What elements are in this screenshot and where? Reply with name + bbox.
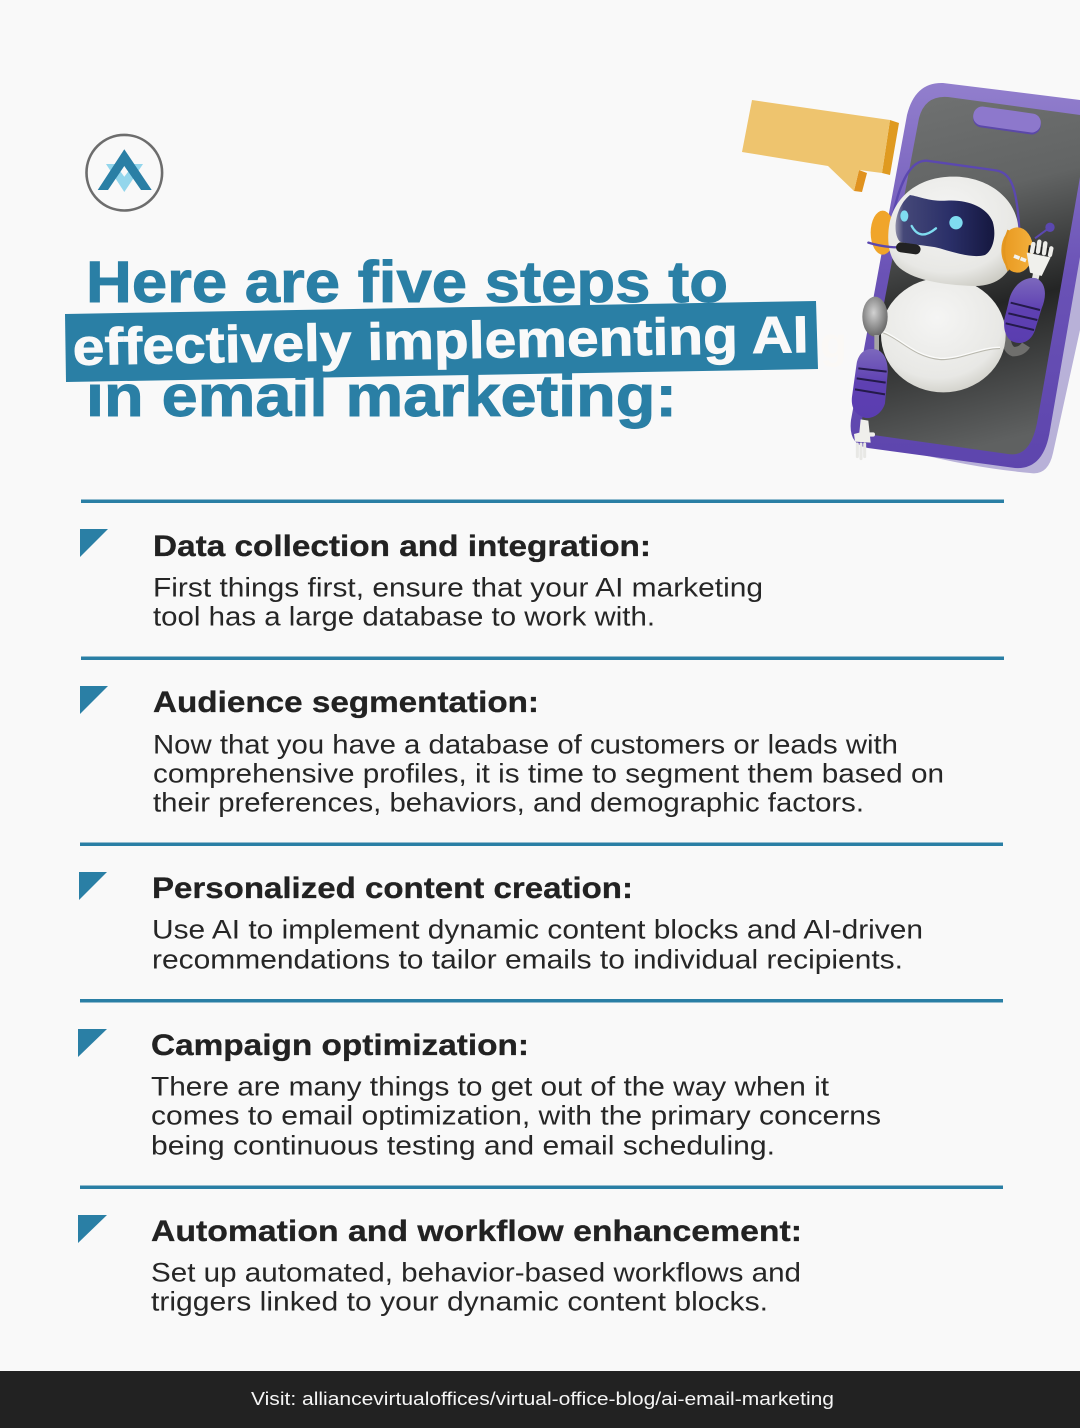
eyes and smile xyxy=(900,210,963,234)
step 2 text xyxy=(153,730,944,818)
step 2 text: their preferences, behaviors, and demographic factors. xyxy=(153,788,864,818)
step 1 heading: Data collection and integration: xyxy=(153,530,651,563)
robot xyxy=(852,161,1055,459)
footer link text: Visit: alliancevirtualoffices/virtual-office-blog/ai-email-marketing xyxy=(251,1389,834,1409)
step 2 heading: Audience segmentation: xyxy=(153,686,539,719)
step 5 xyxy=(78,1186,1003,1317)
step 3 text xyxy=(152,915,923,975)
arms xyxy=(852,278,1045,459)
step 1 text: tool has a large database to work with. xyxy=(153,602,655,632)
step 5 heading: Automation and workflow enhancement: xyxy=(151,1215,802,1248)
title line 3: in email marketing: xyxy=(86,364,677,429)
step 2 text: Now that you have a database of customers or leads with xyxy=(153,730,898,760)
step 2 text: comprehensive profiles, it is time to segment them based on xyxy=(153,759,944,789)
visor xyxy=(896,195,994,256)
step 4 heading: Campaign optimization: xyxy=(151,1029,529,1062)
left shoulder xyxy=(862,297,888,351)
right arm joint xyxy=(1005,320,1026,352)
step 4 text: There are many things to get out of the way when it xyxy=(151,1072,830,1102)
logo xyxy=(86,135,162,210)
title line 1: Here are five steps to xyxy=(86,250,728,315)
illustration: robot on phone with speech bubble xyxy=(742,83,1080,473)
antenna xyxy=(1035,223,1055,238)
phone xyxy=(851,83,1080,473)
step 5 text: Set up automated, behavior-based workflows and xyxy=(151,1258,801,1288)
headset band and left earcup xyxy=(871,161,1019,255)
left arm xyxy=(852,349,888,418)
microphone xyxy=(868,242,921,255)
step 2 xyxy=(80,656,1004,818)
step 5 text: triggers linked to your dynamic content blocks. xyxy=(151,1287,768,1317)
body xyxy=(881,278,1006,392)
faint ghost letter: g xyxy=(820,319,847,368)
step 4 text: comes to email optimization, with the primary concerns xyxy=(151,1101,881,1131)
right arm xyxy=(1004,278,1045,343)
right hand xyxy=(1014,242,1051,280)
step 5 text xyxy=(151,1258,801,1317)
step 3 xyxy=(79,842,1003,975)
left hand xyxy=(854,419,875,459)
title highlight band xyxy=(65,301,818,382)
step 1 text: First things first, ensure that your AI marketing xyxy=(153,573,763,603)
step 3 text: recommendations to tailor emails to individual recipients. xyxy=(152,945,903,975)
step 3 heading: Personalized content creation: xyxy=(152,872,633,905)
head xyxy=(868,177,1055,286)
step 4 text xyxy=(151,1072,881,1161)
step 4 xyxy=(78,999,1003,1161)
step 1 xyxy=(80,500,1004,632)
footer bar xyxy=(0,1371,1080,1428)
right earcup xyxy=(1001,227,1033,273)
step 4 text: being continuous testing and email scheduling. xyxy=(151,1131,775,1161)
title line 2: effectively implementing AI xyxy=(72,306,809,377)
speech bubble xyxy=(742,100,899,192)
step 3 text: Use AI to implement dynamic content blocks and AI-driven xyxy=(152,915,923,945)
step 1 text xyxy=(153,573,763,632)
